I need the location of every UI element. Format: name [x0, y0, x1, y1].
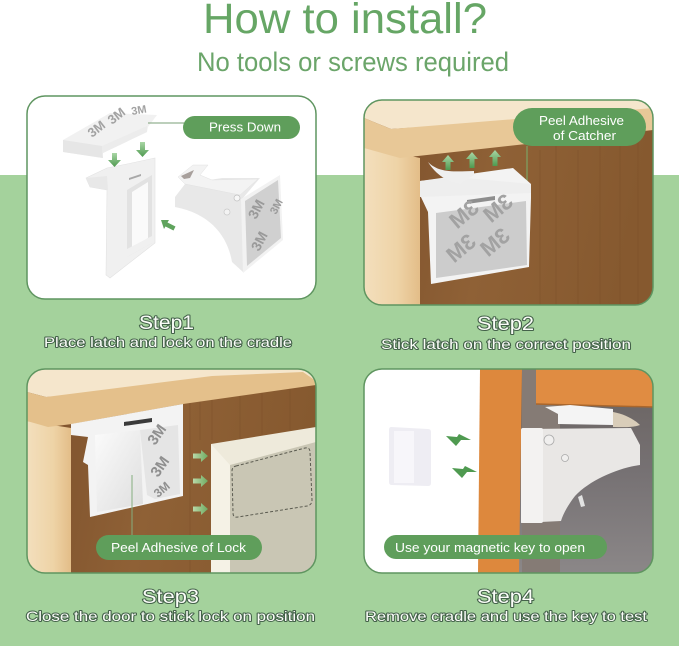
part: catcher body: 3M [478, 189, 518, 227]
part: lock plate [71, 404, 183, 517]
part: latch [545, 405, 640, 427]
callout: Press Down: Press Down [209, 120, 281, 134]
callout: Peel Adhesive of Lock [96, 535, 262, 560]
orange door edge [536, 369, 653, 407]
step 3 heading: Step3 [142, 587, 199, 608]
dark gap [519, 369, 653, 573]
callout: Peel Adhesive of Catcher: of Catcher [553, 129, 616, 143]
arrow: right 3 [193, 503, 208, 515]
top face [364, 100, 653, 129]
door front [211, 427, 316, 465]
callout: Peel Adhesive of Lock: Peel Adhesive of Lock [111, 541, 247, 555]
part: lock plate: 3M [147, 453, 173, 480]
panel: step 2 illustration [364, 100, 653, 305]
step 4 heading: Step4 [477, 587, 534, 608]
wood grain [540, 146, 556, 274]
panel: step 4 illustration [364, 369, 653, 573]
panel: step 1 illustration [27, 96, 316, 299]
callout: Use your magnetic key to open [384, 535, 607, 559]
part: catcher body: 3M [444, 195, 484, 233]
icon: magnetic bolt top [446, 434, 471, 446]
part: catcher body: 3M [441, 229, 481, 267]
part: lock adhesive plate: 3M [245, 197, 268, 221]
callout: Peel Adhesive of Catcher: Peel Adhesive [539, 114, 624, 128]
arrow: right down arrow [136, 142, 149, 157]
part: lock plate: 3M [151, 479, 173, 500]
part: catcher body [420, 168, 531, 284]
callout: Use your magnetic key to open: Use your magnetic key to open [395, 541, 585, 555]
part: lock adhesive plate [241, 175, 286, 273]
part: adhesive latch piece: 3M [130, 103, 148, 118]
wood grain [190, 400, 212, 572]
part: cradle frame [86, 158, 155, 278]
part: lock plate: 3M [144, 421, 170, 448]
arrow: up 2 [466, 152, 478, 168]
orange frame [478, 369, 522, 573]
part: lock adhesive plate: 3M [268, 197, 286, 216]
callout: Press Down [183, 116, 300, 139]
front trim [364, 108, 653, 158]
background: green lower band [0, 175, 679, 646]
connector line [131, 475, 133, 536]
step 1 description: Place latch and lock on the cradle [44, 334, 292, 350]
arrow: toward cradle [161, 220, 176, 230]
step 2 heading: Step2 [477, 314, 534, 335]
step 4 description: Remove cradle and use the key to test [365, 608, 647, 624]
frame side [364, 146, 420, 305]
part: adhesive latch piece: 3M [85, 117, 108, 140]
part: lock body [175, 165, 260, 272]
step 1 heading: Step1 [139, 313, 194, 334]
arrow: right 2 [193, 475, 208, 487]
arrow: right 1 [193, 450, 208, 462]
frame side [27, 421, 71, 573]
part: catcher body: 3M [475, 223, 515, 261]
part: adhesive latch piece: 3M [105, 104, 128, 127]
part: peeled film [428, 162, 474, 184]
arrow: up 3 [489, 150, 501, 166]
door back face [230, 442, 316, 573]
part: lock adhesive plate: 3M [248, 229, 271, 253]
subtitle: No tools or screws required [197, 47, 509, 77]
callout: Peel Adhesive of Catcher [513, 108, 646, 146]
arrow: left down arrow [108, 153, 121, 167]
icon: magnetic bolt bottom [452, 466, 477, 478]
dashed position outline [232, 448, 312, 517]
part: adhesive latch piece [63, 103, 157, 158]
arrow: up 1 [442, 155, 454, 170]
icon: magnetic key [389, 427, 431, 486]
part: lock body [521, 428, 640, 523]
front trim [27, 372, 316, 427]
connector line [148, 122, 184, 124]
panel: step 3 illustration [27, 369, 316, 573]
step 2 description: Stick latch on the correct position [381, 336, 631, 352]
step 3 description: Close the door to stick lock on position [26, 608, 315, 624]
top face [27, 369, 316, 397]
